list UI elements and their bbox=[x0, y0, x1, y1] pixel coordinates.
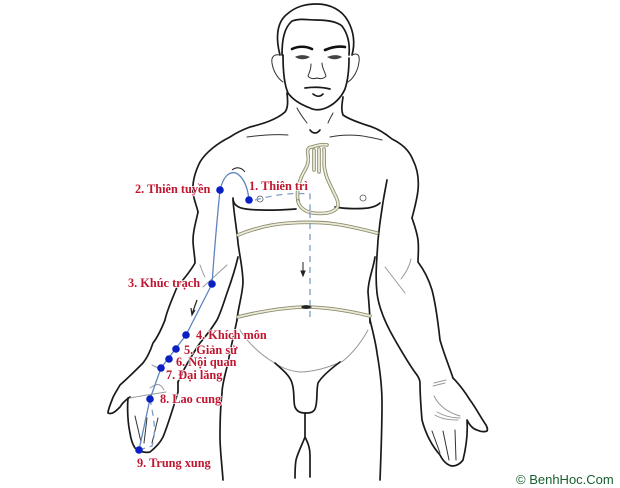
point 8: 8. Lao cung bbox=[160, 392, 222, 406]
point 7 bbox=[157, 364, 223, 382]
rib band bbox=[238, 222, 377, 235]
waist band bbox=[238, 307, 370, 317]
torso bbox=[233, 198, 380, 323]
nipples and navel bbox=[257, 195, 366, 309]
watermark: © BenhHoc.Com bbox=[516, 472, 614, 487]
point 9: 9. Trung xung bbox=[137, 456, 212, 470]
point 9 bbox=[135, 446, 212, 470]
human body figure bbox=[108, 4, 487, 480]
point 1 bbox=[245, 179, 308, 204]
point 3: 3. Khúc trạch bbox=[128, 276, 200, 290]
neck and shoulders bbox=[193, 93, 418, 218]
lower body bbox=[220, 320, 382, 480]
right arm and hand bbox=[376, 180, 487, 466]
point 7: 7. Đại lăng bbox=[166, 368, 223, 382]
head bbox=[272, 4, 359, 110]
point 5: 5. Giản sử bbox=[184, 343, 238, 357]
point 2: 2. Thiên tuyền bbox=[135, 182, 210, 196]
point 1: 1. Thiên trì bbox=[249, 179, 308, 193]
heart and vessels bbox=[297, 145, 338, 213]
point 6: 6. Nội quan bbox=[176, 355, 237, 369]
point 4: 4. Khích môn bbox=[196, 328, 267, 342]
acupoints with labels bbox=[128, 179, 308, 470]
left arm and hand bbox=[108, 212, 238, 452]
meridian line bbox=[139, 168, 310, 450]
